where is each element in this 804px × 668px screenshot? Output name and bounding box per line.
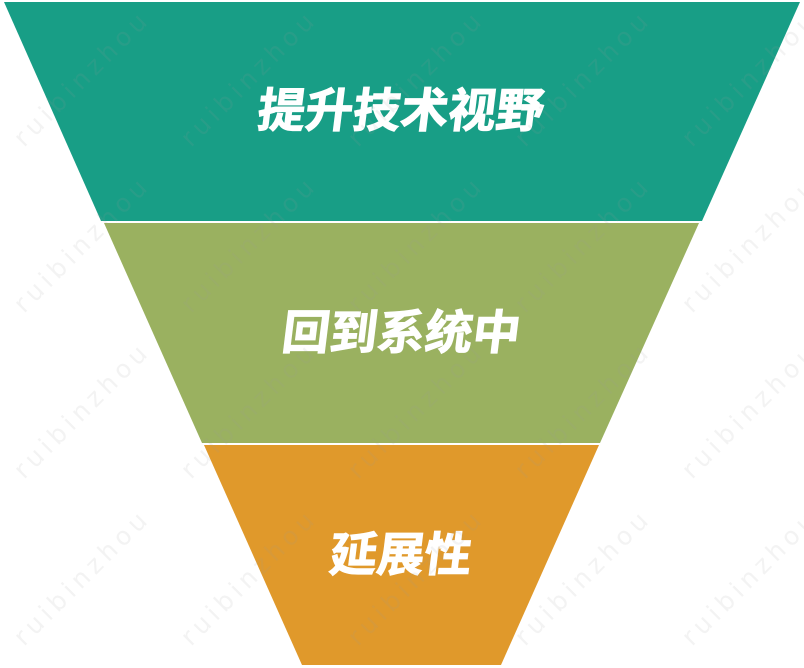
watermark pattern: ruibinzhou [509,7,654,152]
watermark pattern: ruibinzhou [8,173,153,318]
watermark pattern: ruibinzhou [342,173,487,318]
watermark pattern: ruibinzhou [8,7,153,152]
watermark pattern: ruibinzhou [175,7,320,152]
watermark pattern: ruibinzhou [175,339,320,484]
watermark pattern: ruibinzhou [175,506,320,651]
watermark pattern: ruibinzhou [342,506,487,651]
watermark pattern: ruibinzhou [175,173,320,318]
watermark pattern: ruibinzhou [509,173,654,318]
funnel tier 2: olive green [104,223,699,443]
label: 回到系统中: 回到系统中 [279,306,524,359]
funnel tier 3: orange [204,445,599,665]
watermark pattern: ruibinzhou [8,339,153,484]
watermark pattern: ruibinzhou [8,506,153,651]
label: 延展性: 延展性 [327,528,475,581]
watermark pattern: ruibinzhou [509,339,654,484]
watermark pattern: ruibinzhou [509,506,654,651]
watermark pattern: ruibinzhou [342,339,487,484]
label: 提升技术视野: 提升技术视野 [255,84,547,137]
watermark pattern: ruibinzhou [342,7,487,152]
